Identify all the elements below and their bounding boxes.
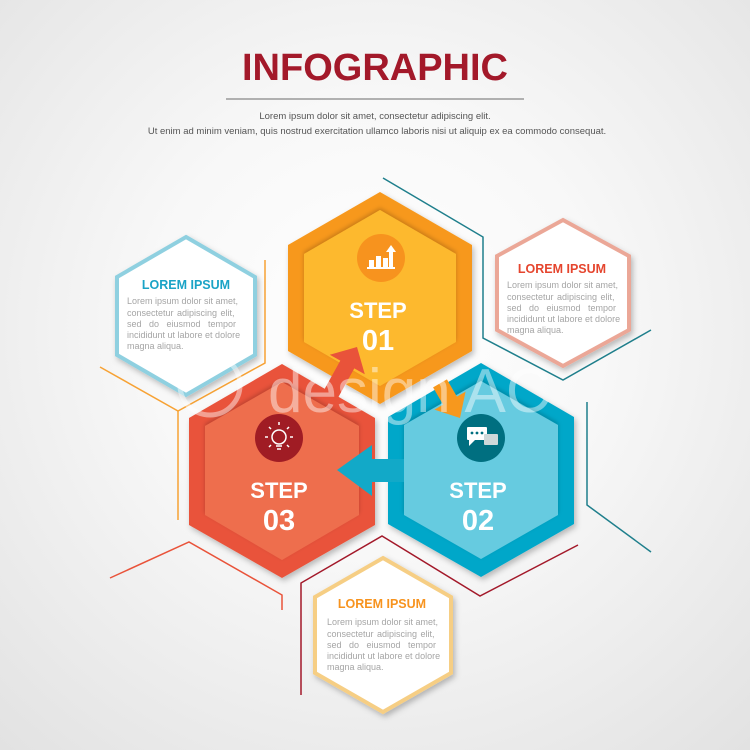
info hex: pink: LOREM IPSUM (518, 262, 606, 276)
subtitle: Ut enim ad minim veniam, quis nostrud exercitation ullamco laboris nisi ut aliquip ex ea commodo consequat. (148, 126, 606, 137)
info hex: blue: magna aliqua. (127, 341, 184, 351)
step 03 hexagon: 03 (263, 505, 295, 537)
info hex: yellow: Lorem ipsum dolor sit amet, (327, 617, 438, 627)
subtitle (148, 111, 606, 137)
watermark: design AC (268, 357, 551, 426)
step 01 hexagon: 01 (362, 325, 394, 357)
arrow: step 02 to step 03 (337, 445, 404, 496)
icon: light bulb (255, 414, 303, 462)
info hex: yellow: incididunt ut labore et dolore (327, 651, 440, 661)
decorative outline lines (100, 178, 651, 695)
info hex: pink: consectetur adipiscing elit, (507, 292, 615, 302)
info hex: pink: magna aliqua. (507, 325, 564, 335)
info hex: blue: consectetur adipiscing elit, (127, 308, 235, 318)
info hex: pink: Lorem ipsum dolor sit amet, (507, 280, 618, 290)
subtitle: Lorem ipsum dolor sit amet, consectetur adipiscing elit. (259, 111, 491, 122)
info hex: blue: sed do eiusmod tempor (127, 319, 236, 329)
arrow: step 01 to step 02 (424, 374, 476, 427)
step 03 hexagon (189, 364, 375, 578)
step 02 hexagon (388, 363, 574, 577)
icon: chat bubbles (457, 414, 505, 462)
info hex: yellow: consectetur adipiscing elit, (327, 629, 435, 639)
step 02 hexagon: STEP (449, 478, 507, 503)
info hex: yellow: magna aliqua. (327, 662, 384, 672)
step 01 hexagon (288, 192, 472, 404)
info hex: blue: Lorem ipsum dolor sit amet, (127, 296, 238, 306)
info hex: yellow: LOREM IPSUM (338, 597, 426, 611)
title: INFOGRAPHIC (242, 47, 508, 89)
info hex: yellow: sed do eiusmod tempor (327, 640, 436, 650)
step 01 hexagon: STEP (349, 298, 407, 323)
info hex: pink: incididunt ut labore et dolore (507, 314, 620, 324)
icon: bar chart (357, 234, 405, 282)
info hex: pink (497, 220, 629, 366)
info hex: blue (117, 237, 255, 395)
step 03 hexagon: STEP (250, 478, 308, 503)
info hex: blue: incididunt ut labore et dolore (127, 330, 240, 340)
info hex: yellow (315, 558, 451, 712)
arrow: step 03 to step 01 (310, 337, 374, 409)
info hex: blue: LOREM IPSUM (142, 278, 230, 292)
info hex: pink: sed do eiusmod tempor (507, 303, 616, 313)
step 02 hexagon: 02 (462, 505, 494, 537)
